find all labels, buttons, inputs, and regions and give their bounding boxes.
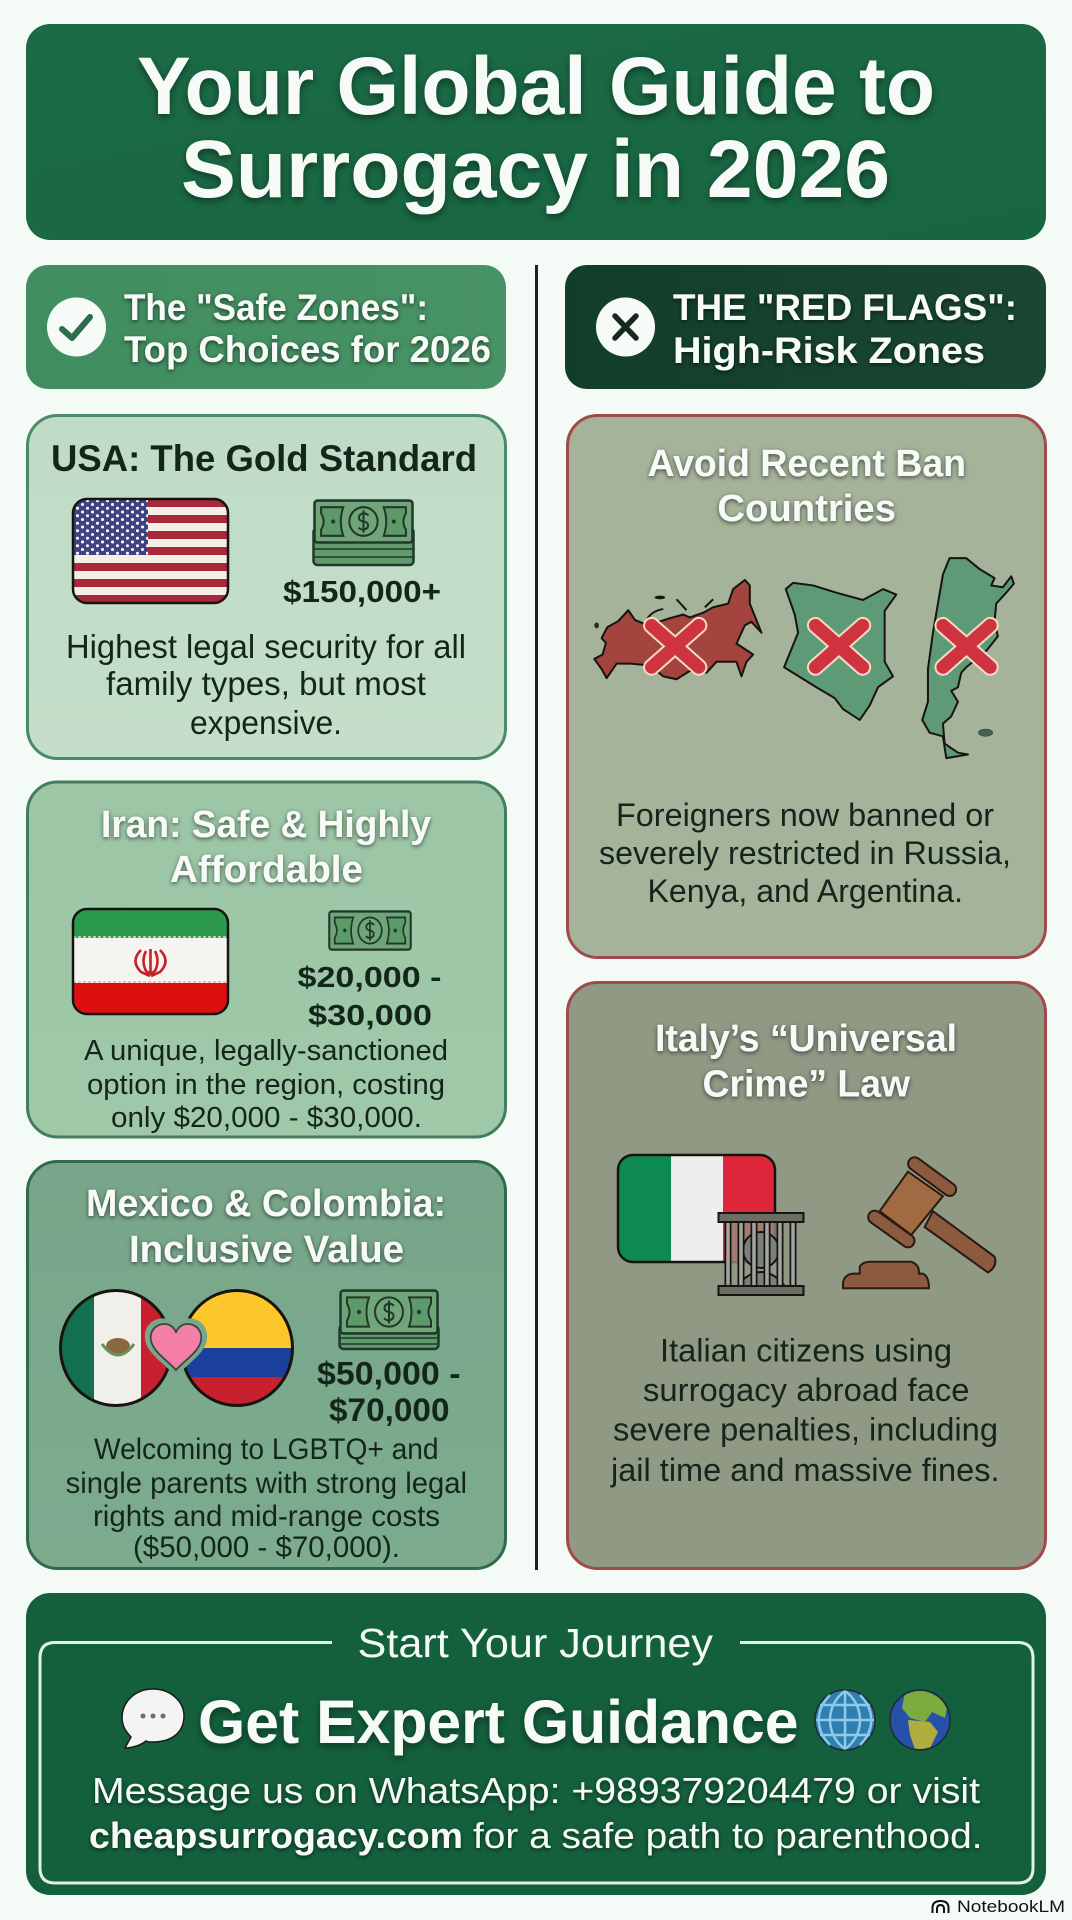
Italy description: surrogacy abroad face (643, 1372, 970, 1408)
icon: x mark (596, 298, 655, 356)
USA description (66, 628, 466, 741)
icon: USA flag (73, 499, 228, 603)
Mexico and Colombia description (66, 1433, 467, 1564)
Mexico and Colombia description: rights and mid-range costs (93, 1500, 440, 1533)
CTA heading: Get Expert Guidance (198, 1688, 798, 1756)
Mexico and Colombia heading: Inclusive Value (129, 1229, 404, 1271)
Mexico and Colombia heading: Mexico & Colombia: (86, 1183, 446, 1225)
icon: check mark (47, 298, 106, 356)
icon: Italy flag (618, 1155, 775, 1262)
title banner (26, 24, 1046, 240)
contact text: cheapsurrogacy.com (89, 1815, 463, 1856)
ban description: Kenya, and Argentina. (648, 873, 963, 909)
watermark: NotebookLM (957, 1897, 1065, 1916)
USA description: expensive. (190, 704, 342, 741)
Iran description: option in the region, costing (87, 1069, 445, 1101)
panel: safe zones header (26, 265, 506, 389)
cost: $70,000 (329, 1392, 450, 1428)
icon: jail cage (718, 1213, 804, 1295)
USA heading: USA: The Gold Standard (51, 438, 477, 479)
Italy description (610, 1332, 1000, 1488)
Iran description (84, 1035, 448, 1134)
icon: Iran flag (73, 909, 228, 1014)
safe zones heading: The "Safe Zones": (124, 287, 428, 328)
Iran description: only $20,000 - $30,000. (111, 1102, 422, 1134)
icon: earth globe (890, 1690, 950, 1752)
panel: USA (28, 416, 506, 758)
Iran heading (101, 804, 431, 891)
Mexico and Colombia description: single parents with strong legal (66, 1467, 467, 1500)
Italy description: Italian citizens using (660, 1332, 952, 1368)
cost: $150,000+ (283, 574, 441, 609)
cost (298, 962, 442, 1032)
Iran heading: Iran: Safe & Highly (101, 804, 431, 846)
USA description: family types, but most (106, 665, 426, 702)
title: Your Global Guide to (137, 41, 935, 132)
ban description: severely restricted in Russia, (599, 835, 1011, 871)
title (137, 41, 935, 215)
panel: call to action footer (26, 1593, 1046, 1895)
icon: Russia map (594, 580, 761, 679)
cost: $50,000 - (317, 1356, 460, 1392)
icon: Kenya map (784, 583, 896, 720)
Mexico and Colombia description: Welcoming to LGBTQ+ and (94, 1433, 439, 1466)
icon: Colombia flag (180, 1290, 296, 1407)
icon: Mexico flag (60, 1290, 173, 1406)
Iran heading: Affordable (170, 849, 363, 891)
Mexico and Colombia heading (86, 1183, 446, 1271)
panel: red flags header (565, 265, 1046, 389)
panel: Mexico and Colombia (28, 1162, 506, 1568)
ban description: Foreigners now banned or (616, 797, 994, 833)
recent ban heading: Countries (717, 488, 896, 530)
icon: banknote (329, 911, 411, 950)
icon: speech bubble (122, 1689, 184, 1748)
Mexico and Colombia description: ($50,000 - $70,000). (133, 1531, 400, 1564)
cost (317, 1356, 460, 1428)
panel: Italy universal crime law (568, 982, 1046, 1568)
recent ban heading (648, 443, 966, 530)
panel: recent ban countries (568, 416, 1046, 958)
ban description (599, 797, 1011, 909)
Italy heading (655, 1018, 957, 1106)
red flags heading: High-Risk Zones (673, 330, 985, 371)
Italy heading: Italy’s “Universal (655, 1018, 957, 1060)
red flags heading: THE "RED FLAGS": (673, 287, 1017, 328)
title: Surrogacy in 2026 (181, 124, 890, 215)
footer eyebrow: Start Your Journey (358, 1620, 714, 1666)
icon: cash stack (314, 501, 414, 565)
Italy heading: Crime” Law (702, 1064, 910, 1106)
icon: heart (147, 1321, 205, 1373)
Iran description: A unique, legally-sanctioned (84, 1035, 448, 1067)
recent ban heading: Avoid Recent Ban (648, 443, 966, 485)
icon: cash stack (340, 1291, 438, 1349)
contact text: for a safe path to parenthood. (473, 1815, 982, 1856)
safe zones heading (124, 287, 491, 370)
contact text: Message us on WhatsApp: +989379204479 or visit (92, 1770, 980, 1811)
Italy description: jail time and massive fines. (610, 1452, 1000, 1488)
icon: Argentina map (922, 558, 1014, 758)
cost: $20,000 - (298, 962, 442, 994)
column divider (535, 265, 538, 1570)
icon: globe with meridians (815, 1690, 875, 1750)
cost: $30,000 (308, 1000, 432, 1032)
red flags heading (673, 287, 1017, 371)
icon: gavel (843, 1164, 995, 1288)
panel: Iran (28, 782, 506, 1137)
safe zones heading: Top Choices for 2026 (124, 329, 491, 370)
USA description: Highest legal security for all (66, 628, 466, 665)
Italy description: severe penalties, including (613, 1412, 998, 1448)
contact text (89, 1770, 982, 1856)
